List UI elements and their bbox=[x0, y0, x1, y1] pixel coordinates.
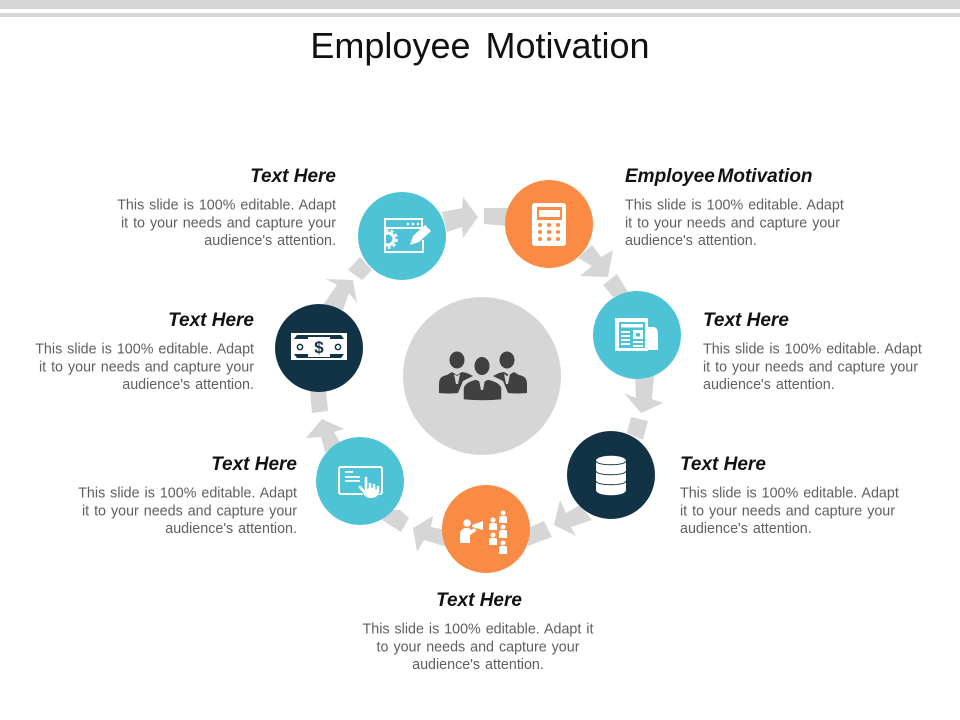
text block: lower right: Text Here bbox=[680, 454, 766, 475]
text block: middle left: audience's attention. bbox=[122, 377, 254, 393]
icon: newspaper bbox=[615, 318, 658, 351]
text block: lower left: Text Here bbox=[211, 454, 297, 475]
text block: lower left bbox=[78, 454, 297, 537]
text block: lower left: This slide is 100% editable. Adapt bbox=[78, 486, 297, 502]
node: database bbox=[567, 431, 655, 519]
text block: lower right: This slide is 100% editable. Adapt bbox=[680, 486, 899, 502]
text block: middle right: it to your needs and capture your bbox=[703, 360, 918, 376]
text block: bottom: audience's attention. bbox=[412, 657, 544, 673]
icon: three business people bbox=[439, 352, 527, 401]
icon: calculator bbox=[532, 203, 566, 246]
text block: lower left: audience's attention. bbox=[165, 521, 297, 537]
node: settings window bbox=[358, 192, 446, 280]
text block: top left: Text Here bbox=[250, 166, 336, 187]
text block: top right: audience's attention. bbox=[625, 233, 757, 249]
icon: speaker and team bbox=[460, 510, 507, 554]
text block: middle left: Text Here bbox=[168, 310, 254, 331]
text block: lower left: it to your needs and capture your bbox=[82, 504, 297, 520]
title: Employee Motivation bbox=[310, 25, 650, 66]
text block: bottom bbox=[363, 590, 593, 673]
text block: lower right: audience's attention. bbox=[680, 521, 812, 537]
text block: top left: audience's attention. bbox=[204, 233, 336, 249]
text block: middle left: This slide is 100% editable. Adapt bbox=[35, 342, 254, 358]
text block: middle left bbox=[35, 310, 254, 393]
ring of arrows bbox=[306, 197, 663, 552]
text block: bottom: Text Here bbox=[436, 590, 522, 611]
text block: top right: Employee Motivation bbox=[625, 166, 813, 187]
text block: middle right: audience's attention. bbox=[703, 377, 835, 393]
text block: lower right bbox=[680, 454, 899, 537]
node: touch screen bbox=[316, 437, 404, 525]
text block: top right bbox=[625, 166, 844, 249]
icon: hand on screen bbox=[339, 467, 382, 498]
icon: banknote with dollar: $ bbox=[314, 338, 324, 357]
node: calculator bbox=[505, 180, 593, 268]
text block: middle left: it to your needs and capture your bbox=[39, 360, 254, 376]
text block: top left: This slide is 100% editable. Adapt bbox=[117, 198, 336, 214]
text block: top left: it to your needs and capture your bbox=[121, 216, 336, 232]
text block: top right: This slide is 100% editable. Adapt bbox=[625, 198, 844, 214]
icon: window, gear and pencil bbox=[376, 219, 431, 253]
text block: top left bbox=[117, 166, 336, 249]
text block: middle right bbox=[703, 310, 922, 393]
text block: middle right: Text Here bbox=[703, 310, 789, 331]
text block: bottom: to your needs and capture your bbox=[377, 640, 580, 656]
text block: lower right: it to your needs and capture your bbox=[680, 504, 895, 520]
node: newspaper bbox=[593, 291, 681, 379]
text block: bottom: This slide is 100% editable. Adapt it bbox=[363, 622, 593, 638]
node: banknote bbox=[275, 304, 363, 392]
central circle with people icon bbox=[403, 297, 561, 455]
node: team with megaphone bbox=[442, 485, 530, 573]
icon: database cylinder bbox=[596, 456, 626, 495]
text block: middle right: This slide is 100% editable. Adapt bbox=[703, 342, 922, 358]
text block: top right: it to your needs and capture your bbox=[625, 216, 840, 232]
